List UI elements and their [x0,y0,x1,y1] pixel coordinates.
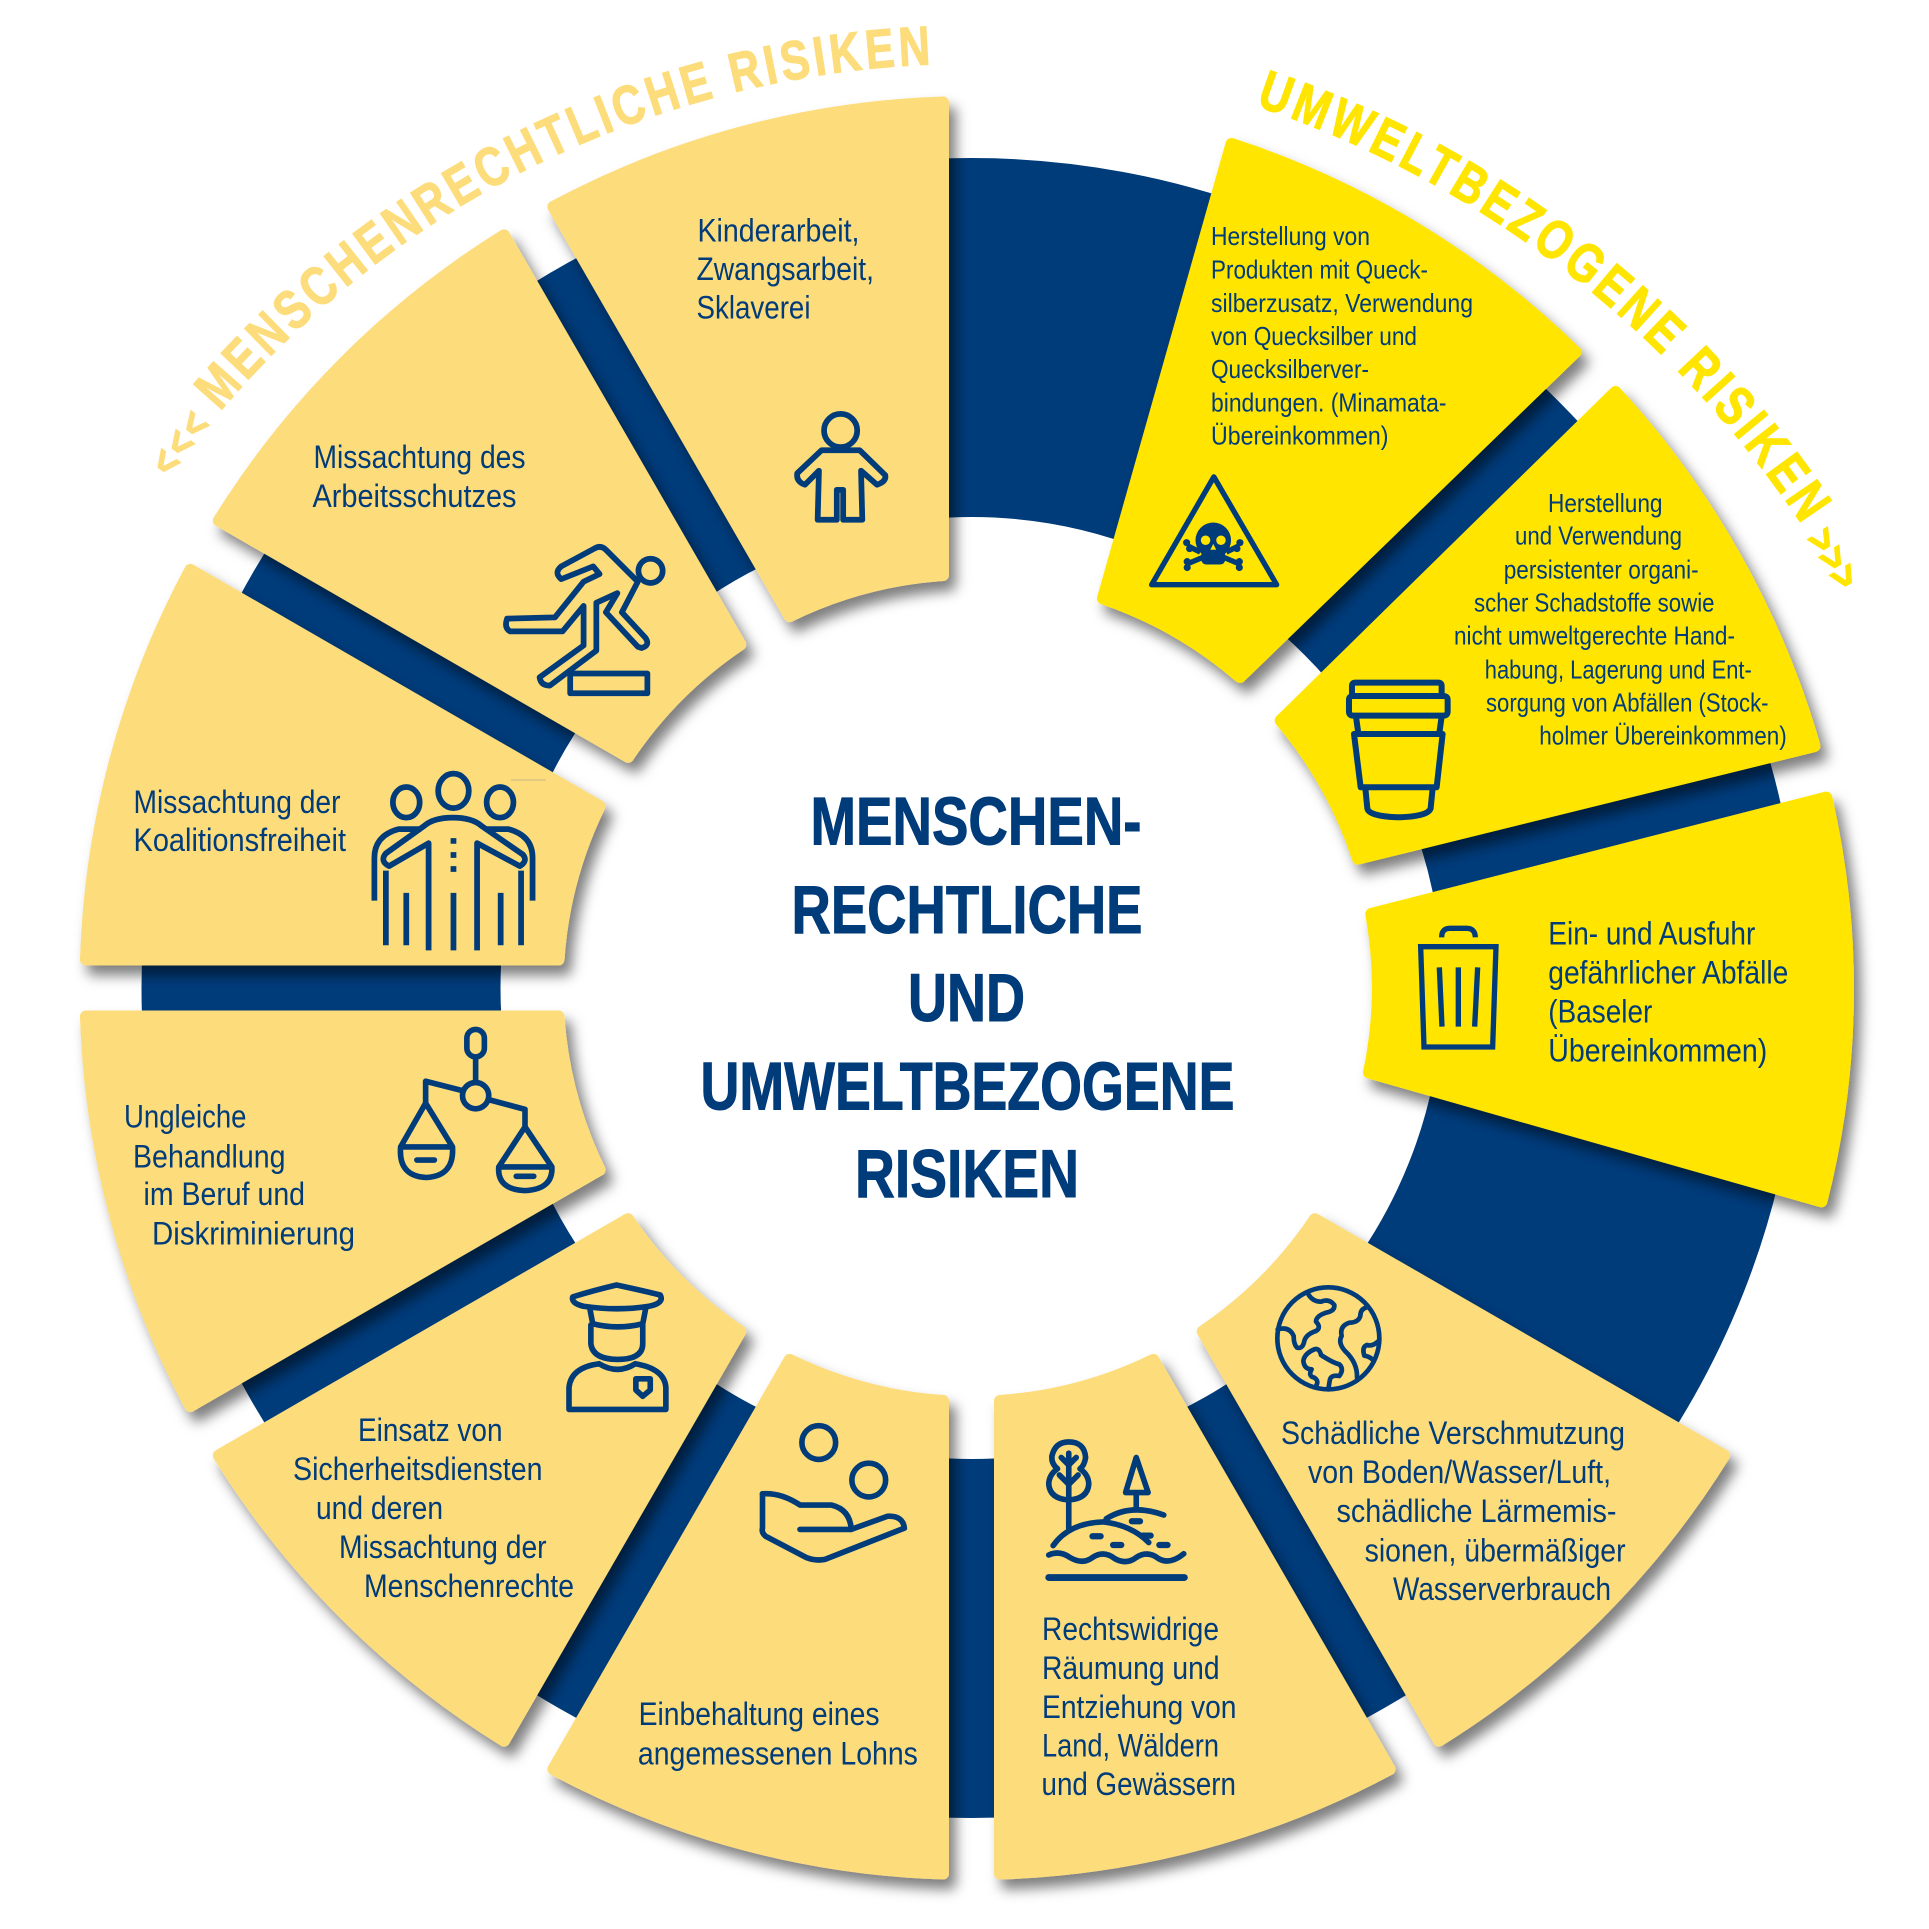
panel: Verschmutzung [1085,1199,1724,1793]
text: Diskriminierung [124,1098,355,1252]
panel: Kinderarbeit [553,12,1148,652]
text: Baseler: Ein- und Ausfuhr [1548,915,1756,951]
heading: menschenrechtliche Risiken arc: MENSCHENRECHTLICHE RISIKEN [192,26,928,410]
text: Quecksilber: von Quecksilber und [1211,321,1417,351]
title: RISIKEN [855,1136,1079,1212]
text: Arbeitsschutz: Arbeitsschutzes [312,478,516,514]
text: Sicherheitsdienste: Einsatz von [358,1412,502,1448]
text: Räumung: Rechtswidrige [1042,1611,1219,1647]
text: Diskriminierung: Behandlung [133,1138,286,1174]
text: Koalitionsfreiheit: Koalitionsfreiheit [134,822,346,858]
text: Lohn: angemessenen Lohns [638,1736,918,1772]
icon: trash can [1421,928,1496,1047]
text: Sicherheitsdienste: Missachtung der [339,1529,547,1565]
title: RECHTLICHE [792,872,1142,948]
title [700,783,1234,1212]
text: Arbeitsschutz [312,439,526,514]
text: persistente Schadstoffe [1454,488,1787,750]
icon: skull warning triangle [1152,477,1277,585]
icon: coffee cup [1349,683,1448,817]
panel: Sicherheitsdienste [167,1101,761,1741]
text: Quecksilber [1211,221,1473,450]
text: Sicherheitsdienste: und deren [316,1490,443,1526]
text: Quecksilber: Quecksilberver- [1211,354,1369,384]
text: Verschmutzung: Wasserverbrauch [1393,1571,1611,1607]
text: Räumung: Räumung und [1042,1650,1220,1686]
text: Lohn: Einbehaltung eines [639,1696,880,1732]
text: persistente Schadstoffe: habung, Lagerung und Ent- [1485,654,1752,684]
icon: child [797,414,885,520]
text: Lohn [638,1696,918,1772]
panel: Arbeitsschutz [219,183,858,777]
text: Verschmutzung [1281,1415,1626,1607]
text: Räumung: Entziehung von [1042,1689,1236,1725]
icon: hand with coins [762,1426,904,1560]
panel: Diskriminierung [0,812,635,1406]
heading: umweltbezogene Risiken arc: UMWELTBEZOGENE RISIKEN [1260,70,1832,523]
text: persistente Schadstoffe: holmer Übereinkommen) [1539,720,1787,750]
text: Diskriminierung: Diskriminierung [152,1216,355,1252]
panel: Baseler [1369,798,1848,1201]
text: Diskriminierung: im Beruf und [144,1176,305,1212]
text: persistente Schadstoffe: nicht umweltgerechte Hand- [1454,621,1735,651]
text: persistente Schadstoffe: und Verwendung [1515,521,1682,551]
text: Quecksilber: Übereinkommen) [1211,420,1388,450]
text: persistente Schadstoffe: scher Schadstoffe sowie [1474,588,1714,618]
text: Kinderarbeit: Sklaverei [696,290,810,326]
text: Sicherheitsdienste: Menschenrechte [364,1568,574,1604]
icon: globe [1277,1287,1379,1389]
panel: Räumung [795,1324,1390,1929]
text: Diskriminierung: Ungleiche [124,1098,246,1134]
text: Baseler [1548,915,1788,1069]
icon: group of people [374,774,533,950]
panel: Lohn [553,1360,943,1874]
text: Baseler: (Baseler [1548,994,1653,1030]
icon: falling worker [506,547,663,693]
panel: persistente Schadstoffe [1281,392,1814,859]
text: Koalitionsfreiheit [134,784,346,858]
text: Quecksilber: Produkten mit Queck- [1211,255,1428,285]
panel: Quecksilber [1103,144,1576,677]
text: Arbeitsschutz: Missachtung des [314,439,526,475]
text: Koalitionsfreiheit: Missachtung der [134,784,341,820]
icon: security guard [569,1285,666,1409]
text: Räumung [1042,1611,1236,1802]
text: Kinderarbeit: Kinderarbeit, [698,212,860,248]
text: persistente Schadstoffe: Herstellung [1548,488,1662,518]
text: Räumung: Land, Wäldern [1042,1728,1219,1764]
text: Baseler: gefährlicher Abfälle [1548,954,1788,990]
text: Verschmutzung: von Boden/Wasser/Luft, [1308,1454,1611,1490]
title: UMWELTBEZOGENE [700,1049,1234,1125]
text: Kinderarbeit [696,212,874,326]
text: Quecksilber: bindungen. (Minamata- [1211,387,1446,417]
text: Verschmutzung: Schädliche Verschmutzung [1281,1415,1625,1451]
text: Verschmutzung: schädliche Lärmemis- [1336,1493,1616,1529]
icon: scales [400,1029,552,1191]
text: Quecksilber: Herstellung von [1211,221,1370,251]
text: Verschmutzung: sionen, übermäßiger [1365,1532,1626,1568]
text: Quecksilber: silberzusatz, Verwendung [1211,288,1473,318]
background ring [321,338,1622,1638]
text: Baseler: Übereinkommen) [1548,1033,1767,1069]
panel: Koalitionsfreiheit [86,570,600,960]
text: Räumung: und Gewässern [1042,1766,1236,1802]
text: Sicherheitsdienste: Sicherheitsdiensten [293,1451,542,1487]
icon: landscape [1049,1442,1184,1578]
text: persistente Schadstoffe: persistenter organi- [1504,554,1699,584]
heading: menschenrechtliche Risiken arc: <<< [158,410,210,472]
text: persistente Schadstoffe: sorgung von Abfällen (Stock- [1486,688,1768,718]
title: MENSCHEN- [810,783,1142,859]
heading: umweltbezogene Risiken arc: >>> [1806,526,1852,587]
text: Kinderarbeit: Zwangsarbeit, [696,251,874,287]
text: Sicherheitsdienste [293,1412,574,1604]
title: UND [908,960,1025,1036]
